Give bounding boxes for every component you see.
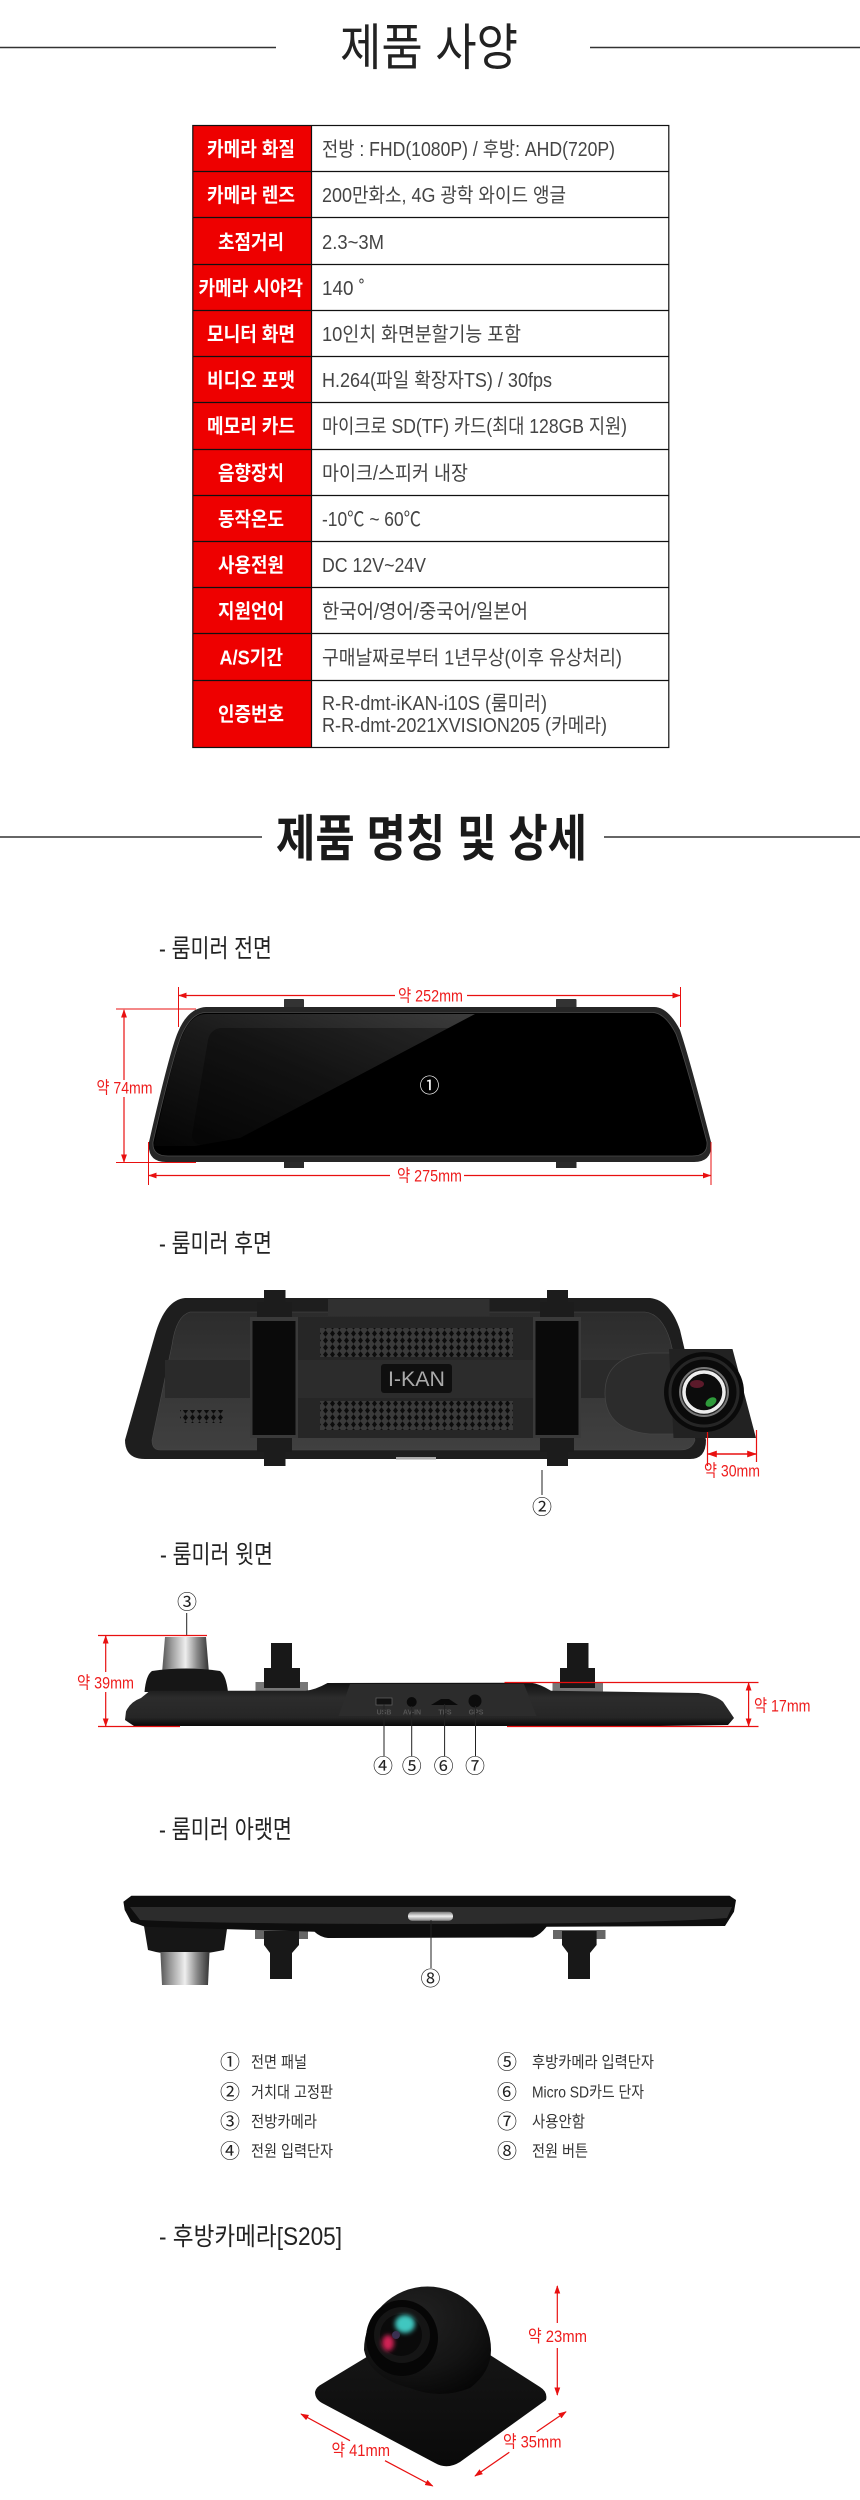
spec row: languages: 지원언어 [218, 600, 284, 623]
illustration: mirror top view [125, 1637, 734, 1726]
legend: numbered parts [220, 2051, 654, 2163]
legend item 3: 전방카메라 [251, 2113, 317, 2131]
dimension: height 39mm [77, 1636, 207, 1726]
callout: number 2 [532, 1470, 552, 1519]
clip right [553, 1930, 606, 1979]
dimension: height 17mm [504, 1682, 810, 1726]
spec row: focal distance: 2.3~3M [322, 232, 384, 254]
spec row: operating temperature [218, 508, 421, 531]
spec row: video format: 비디오 포맷 [207, 369, 295, 392]
callouts: numbers 4 to 7: ⑦ [465, 1755, 485, 1778]
legend item 8: 전원 버튼 [532, 2142, 588, 2160]
heading: mirror top: - 룸미러 윗면 [160, 1541, 273, 1569]
illustration: rear camera [315, 2286, 546, 2466]
spec row: certification numbers [218, 692, 607, 737]
ports: TFS [438, 1710, 452, 1716]
logo badge [381, 1364, 452, 1393]
dimension: height 74mm: 약 74mm [96, 1078, 152, 1098]
spec row: power: 사용전원 [218, 554, 284, 577]
mirror body [125, 1683, 734, 1726]
spec row: camera quality [207, 138, 615, 161]
legend item 6 [497, 2081, 644, 2104]
spec row: camera lens: 200만화소, 4G 광학 와이드 앵글 [322, 184, 566, 207]
spec row: camera quality: 카메라 화질 [207, 138, 295, 161]
spec row: viewing angle: 140 ˚ [322, 278, 365, 300]
spec row: warranty [220, 646, 622, 670]
grille top [320, 1328, 513, 1357]
spec row: viewing angle: 카메라 시야각 [198, 277, 303, 300]
legend item 6: ⑥ [497, 2081, 517, 2104]
legend item 5: 후방카메라 입력단자 [532, 2054, 654, 2072]
dimension: width 275mm [148, 1142, 711, 1186]
legend item 8: ⑧ [497, 2140, 517, 2163]
callout: number 3: ③ [177, 1591, 197, 1614]
illustration: mirror bottom view [123, 1896, 736, 1985]
callout: number 2: ② [532, 1496, 552, 1519]
spec row: languages [218, 600, 528, 623]
spec row: certification numbers: R-R-dmt-iKAN-i10S (룸미러) [322, 692, 547, 715]
legend item 2: ② [220, 2081, 240, 2104]
ports [376, 1694, 484, 1716]
spec row: audio: 마이크/스피커 내장 [322, 462, 468, 485]
dimension: camera length 41mm: 약 41mm [332, 2441, 390, 2460]
spec row: warranty: A/S기간 [220, 646, 283, 670]
legend item 1: ① [220, 2051, 240, 2074]
port panel [338, 1684, 536, 1716]
spec row: warranty: 구매날짜로부터 1년무상(이후 유상처리) [322, 646, 622, 670]
spec row: certification numbers: 인증번호 [218, 703, 284, 726]
dimension: width 275mm: 약 275mm [397, 1166, 462, 1186]
legend item 1 [220, 2051, 307, 2074]
legend item 4 [220, 2140, 333, 2163]
dimension: height 17mm: 약 17mm [754, 1696, 810, 1716]
strap right [533, 1290, 581, 1466]
spec row: focal distance [218, 231, 384, 254]
legend item 8 [497, 2140, 588, 2163]
dimension: camera length 41mm [301, 2414, 433, 2486]
dimension: camera width 35mm [475, 2412, 566, 2476]
legend item 5: ⑤ [497, 2051, 517, 2074]
spec row: languages: 한국어/영어/중국어/일본어 [322, 600, 528, 623]
illustration: mirror front view [149, 999, 711, 1168]
spec row: audio [218, 462, 468, 485]
dimension: height 74mm [96, 1009, 196, 1162]
legend item 6: Micro SD카드 단자 [532, 2084, 644, 2102]
heading: mirror bottom: - 룸미러 아랫면 [159, 1816, 292, 1844]
panel: specification table [193, 126, 669, 748]
callouts: numbers 4 to 7: ④ [373, 1755, 393, 1778]
spec row: memory card: 마이크로 SD(TF) 카드(최대 128GB 지원) [322, 415, 627, 438]
legend item 2 [220, 2081, 333, 2104]
legend item 7: ⑦ [497, 2110, 517, 2134]
grille bottom [320, 1401, 513, 1430]
spec row: operating temperature: 동작온도 [218, 508, 284, 531]
power button [408, 1912, 453, 1921]
callouts: numbers 4 to 7: ⑤ [402, 1755, 422, 1778]
spec row: camera lens: 카메라 렌즈 [207, 184, 295, 207]
title: product names and details: 제품 명칭 및 상세 [276, 811, 587, 867]
spec row: memory card: 메모리 카드 [207, 415, 295, 438]
label: callout 1: ① [420, 1074, 440, 1098]
spec row: monitor screen: 모니터 화면 [207, 323, 295, 346]
dimension: camera width 35mm: 약 35mm [503, 2432, 562, 2452]
rear camera with lens [605, 1349, 756, 1438]
legend item 4: ④ [220, 2140, 240, 2163]
dimension: width 252mm [178, 986, 680, 1027]
strap left [250, 1290, 298, 1466]
spec row: camera lens [207, 184, 566, 207]
dimension: camera height 23mm: 약 23mm [528, 2327, 587, 2346]
callout: number 8: ⑧ [420, 1968, 440, 1990]
illustration: mirror rear view [125, 1290, 756, 1466]
ports: AV-IN [403, 1710, 421, 1716]
title: product specifications: 제품 사양 [340, 20, 518, 76]
dimension: camera 30mm: 약 30mm [704, 1462, 760, 1480]
spec row: focal distance: 초점거리 [218, 231, 284, 254]
clip left [264, 1643, 300, 1690]
callout: number 8 [420, 1920, 440, 1990]
dimension: height 39mm: 약 39mm [77, 1674, 134, 1692]
legend item 5 [497, 2051, 654, 2074]
bump [328, 1299, 490, 1316]
spec row: viewing angle [198, 277, 365, 300]
clip right [560, 1643, 595, 1690]
callouts: numbers 4 to 7: ⑥ [434, 1755, 454, 1778]
ports: GPS [469, 1710, 484, 1716]
spec row: memory card [207, 415, 627, 438]
spec row: monitor screen: 10인치 화면분할기능 포함 [322, 323, 521, 346]
legend item 1: 전면 패널 [251, 2054, 307, 2072]
heading: mirror front: - 룸미러 전면 [159, 935, 272, 963]
callouts: numbers 4 to 7 [373, 1704, 485, 1778]
logo badge: I-KAN [388, 1368, 445, 1391]
front camera [144, 1637, 228, 1692]
legend item 7: 사용안함 [532, 2113, 585, 2131]
spec row: audio: 음향장치 [218, 462, 284, 485]
speaker [180, 1410, 223, 1423]
spec row: monitor screen [207, 323, 521, 346]
ports: USB [377, 1710, 391, 1716]
callout: number 3 [177, 1591, 197, 1635]
power button edge [396, 1457, 436, 1460]
heading: rear camera: - 후방카메라[S205] [159, 2223, 342, 2251]
front camera [144, 1926, 227, 1985]
legend item 4: 전원 입력단자 [251, 2142, 333, 2160]
spec row: power [218, 554, 427, 577]
legend item 2: 거치대 고정판 [251, 2084, 333, 2102]
legend item 3 [220, 2110, 317, 2134]
dimension: camera height 23mm [528, 2286, 587, 2395]
spec row: video format [207, 369, 552, 392]
legend item 7 [497, 2110, 585, 2134]
heading: mirror rear: - 룸미러 후면 [159, 1230, 272, 1258]
dimension: camera 30mm [704, 1430, 760, 1480]
legend item 3: ③ [220, 2110, 240, 2134]
spec row: camera quality: 전방 : FHD(1080P) / 후방: AHD(720P) [322, 138, 615, 161]
spec row: operating temperature: -10℃ ~ 60℃ [322, 509, 421, 531]
mirror body [123, 1896, 736, 1938]
spec row: video format: H.264(파일 확장자TS) / 30fps [322, 369, 552, 392]
clip left [255, 1930, 308, 1979]
spec row: power: DC 12V~24V [322, 555, 427, 577]
dimension: width 252mm: 약 252mm [398, 986, 463, 1006]
spec row: certification numbers: R-R-dmt-2021XVISION205 (카메라) [322, 714, 607, 737]
